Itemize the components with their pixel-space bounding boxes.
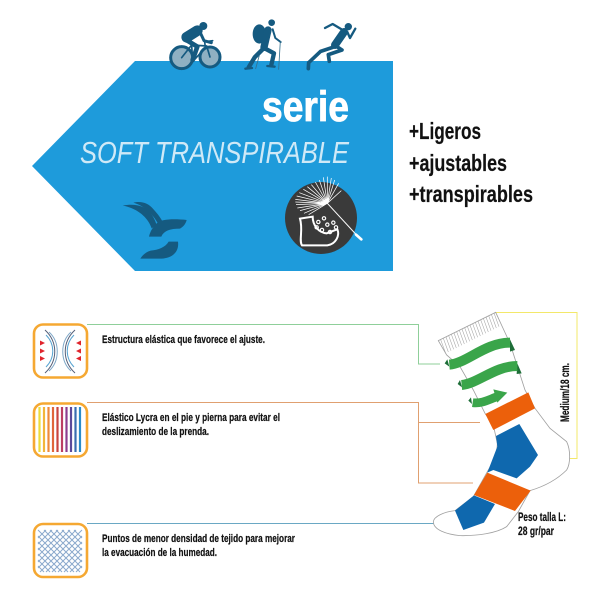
benefits list: +transpirables (409, 181, 533, 207)
sock outline (433, 312, 570, 536)
icon: runner (308, 23, 355, 69)
icon: elastic structure (34, 324, 87, 378)
icon: low-density mesh (34, 524, 87, 577)
leader line: elastic structure (87, 324, 440, 364)
foot outline (300, 217, 338, 245)
ribbed cuff (441, 313, 499, 353)
icon: cyclist (171, 22, 220, 69)
green elastic bands (445, 339, 522, 404)
sock illustration (433, 312, 570, 536)
text: elastic structure: Estructura elástica que favorece el ajuste. (102, 334, 265, 346)
orange band foot (474, 473, 531, 511)
leader line: lycra (87, 402, 480, 483)
series subtitle: SOFT TRANSPIRABLE (80, 135, 349, 170)
icon: lycra stripes (34, 404, 87, 456)
blue foot zone (487, 424, 538, 478)
text: mesh: la evacuación de la humedad. (102, 547, 217, 559)
icon: brand logo (123, 202, 187, 259)
benefits list: +Ligeros (409, 118, 481, 144)
text: lycra: Elástico Lycra en el pie y pierna para evitar el (102, 412, 280, 424)
text: lycra: deslizamiento de la prenda. (102, 426, 209, 438)
text: lycra (102, 412, 280, 438)
bracket: height (496, 312, 577, 458)
series name: serie (262, 83, 349, 131)
text: mesh (102, 533, 296, 559)
orange band ankle (485, 392, 535, 430)
weight label: 28 gr/par (518, 524, 554, 538)
leader line: mesh (87, 522, 451, 524)
text: mesh: Puntos de menor densidad de tejido para mejorar (102, 533, 296, 545)
benefits list: +ajustables (409, 150, 507, 176)
icon: breathable foot badge (285, 177, 361, 254)
dandelion seed (295, 177, 361, 239)
weight label (518, 510, 566, 538)
height label: Medium/18 cm. (558, 363, 572, 422)
icon: hiker (245, 19, 281, 69)
blue arrow banner (32, 61, 393, 271)
moisture drops (315, 217, 338, 234)
benefits list (409, 118, 533, 207)
weight label: Peso talla L: (518, 510, 566, 524)
